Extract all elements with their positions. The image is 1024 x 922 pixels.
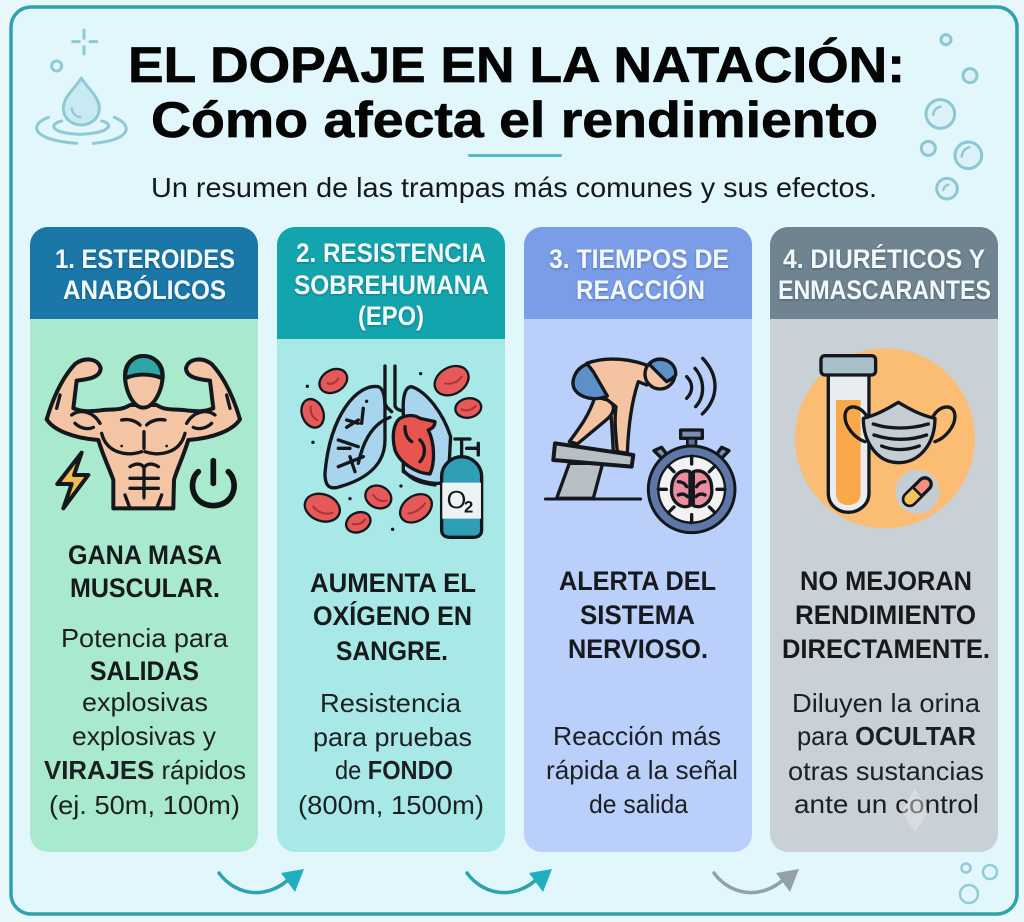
effect description: (ej. 50m, 100m): [49, 790, 240, 820]
header: [30, 227, 258, 319]
effect heading: RENDIMIENTO: [795, 600, 976, 630]
panel: esteroides: [30, 227, 258, 852]
header text: (EPO): [358, 301, 424, 331]
header text: 3. TIEMPOS DE: [549, 244, 729, 274]
panel: reaccion: [524, 227, 752, 852]
effect heading: MUSCULAR.: [70, 573, 220, 603]
effect heading: SANGRE.: [336, 636, 448, 666]
icon: lungs, heart, oxygen: [298, 360, 483, 537]
effect description: para OCULTAR: [797, 721, 976, 751]
effect heading: GANA MASA: [68, 540, 222, 570]
title: [128, 37, 905, 148]
icon: lightning: [57, 453, 88, 508]
effect heading: AUMENTA EL: [310, 568, 476, 598]
effect description: de FONDO: [335, 755, 453, 785]
header text: 1. ESTEROIDES: [55, 244, 235, 274]
header: [770, 227, 998, 319]
effect heading: OXÍGENO EN: [313, 601, 472, 631]
panel: diureticos: [770, 227, 998, 852]
icon: test tube, mask, pill: [795, 348, 975, 528]
icon: power: [193, 461, 234, 506]
header text: REACCIÓN: [576, 274, 705, 305]
effect description: [44, 623, 246, 820]
arrow 2: [467, 869, 552, 893]
effect heading: [310, 568, 476, 666]
header text: [549, 244, 729, 305]
effect heading: DIRECTAMENTE.: [782, 634, 990, 664]
icon: stopwatch with brain: [648, 430, 735, 533]
icon: muscular swimmer: [47, 356, 240, 508]
header text: SOBREHUMANA: [294, 270, 489, 300]
header text: ANABÓLICOS: [63, 274, 226, 305]
effect description: [788, 688, 984, 819]
effect heading: [559, 566, 716, 664]
header text: ENMASCARANTES: [778, 275, 991, 305]
subtitle: Un resumen de las trampas más comunes y sus efectos.: [151, 172, 877, 203]
icon: oxygen tank: [442, 439, 482, 537]
arrow 3: [714, 869, 799, 893]
arrow 1: [219, 869, 304, 893]
effect heading: [782, 566, 990, 664]
effect description: [546, 721, 738, 819]
header text: [294, 238, 489, 331]
icon: oxygen tank: O: [447, 487, 466, 515]
far leg: [610, 403, 623, 452]
effect description: VIRAJES rápidos: [44, 755, 246, 785]
effect description: explosivas: [82, 687, 208, 717]
title: Cómo afecta el rendimiento: [151, 92, 878, 148]
header: [277, 227, 505, 339]
header text: [55, 244, 235, 305]
effect heading: SISTEMA: [580, 600, 695, 630]
effect heading: NERVIOSO.: [568, 634, 708, 664]
icon: bubbles: [921, 35, 982, 199]
near leg: [569, 397, 613, 444]
effect description: para pruebas: [313, 722, 472, 752]
icon: swimmer on block with stopwatch: [545, 358, 735, 533]
effect description: Potencia para: [61, 623, 229, 653]
effect heading: NO MEJORAN: [800, 566, 972, 596]
torso and arm: [587, 359, 654, 453]
icon: water drop: [37, 30, 126, 143]
header: [524, 227, 752, 319]
effect description: Reacción más: [553, 721, 721, 751]
effect description: otras sustancias: [788, 756, 984, 786]
effect description: de salida: [589, 789, 689, 819]
effect description: ante un control: [794, 789, 979, 819]
header text: 4. DIURÉTICOS Y: [783, 243, 985, 274]
effect description: Diluyen la orina: [792, 688, 981, 718]
effect heading: [68, 540, 222, 603]
effect description: [298, 688, 484, 820]
effect description: Resistencia: [320, 688, 462, 718]
icon: small bubbles: [960, 864, 997, 903]
effect description: SALIDAS: [90, 656, 199, 686]
effect heading: ALERTA DEL: [559, 566, 716, 596]
effect description: explosivas y: [72, 721, 216, 751]
effect description: rápida a la señal: [546, 755, 738, 785]
title: EL DOPAJE EN LA NATACIÓN:: [128, 37, 905, 93]
effect description: (800m, 1500m): [298, 790, 484, 820]
header text: 2. RESISTENCIA: [296, 238, 486, 268]
header text: [778, 243, 991, 305]
panel: EPO: [277, 227, 505, 852]
icon: oxygen tank: 2: [464, 498, 473, 517]
